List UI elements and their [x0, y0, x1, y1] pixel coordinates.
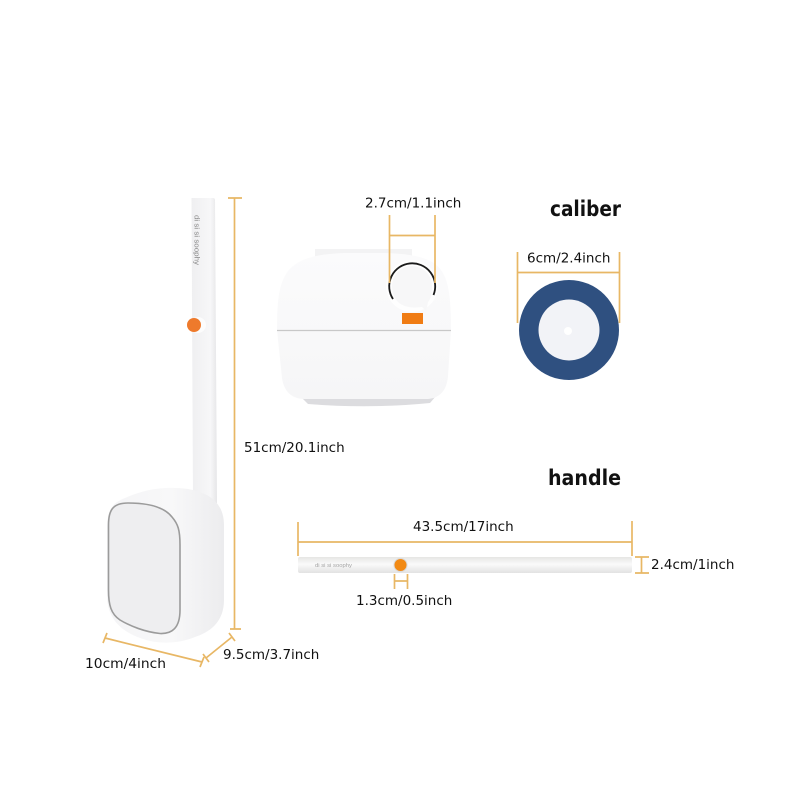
clip black ring — [389, 263, 435, 299]
dimension: width 10cm — [85, 633, 204, 672]
product: round brush head — [519, 280, 619, 380]
dimension: caliber 6cm: 6cm/2.4inch — [527, 250, 610, 266]
orange indicator — [402, 313, 423, 324]
holder divider line — [277, 330, 451, 332]
orange button — [187, 318, 201, 332]
dimension: depth 9.5cm: 9.5cm/3.7inch — [223, 647, 319, 663]
dimension: button 1.3cm — [356, 574, 452, 609]
dimension: height 51cm: 51cm/20.1inch — [244, 440, 345, 456]
dimension: width 10cm: 10cm/4inch — [85, 656, 166, 672]
handle brand mark: di si si soophy — [315, 563, 352, 569]
product: wall holder front view — [277, 249, 451, 406]
dimension: height 51cm — [228, 198, 345, 629]
holder top tab — [315, 249, 412, 263]
clip collar — [386, 260, 438, 312]
orange button — [394, 558, 407, 572]
handle bar — [298, 557, 632, 573]
white center — [538, 300, 600, 360]
brush base — [107, 488, 224, 643]
dimension: handle thickness 2.4cm: 2.4cm/1inch — [651, 557, 734, 573]
product: upright brush with handle — [107, 198, 224, 643]
vertical handle — [192, 198, 217, 503]
dimension: handle length 43.5cm — [298, 519, 632, 556]
dimension: caliber 6cm — [518, 250, 620, 323]
product: horizontal handle — [298, 557, 632, 573]
blue ring — [519, 280, 619, 380]
dimension: clip width 2.7cm — [365, 196, 461, 283]
center nub — [564, 327, 572, 335]
dimension: handle length 43.5cm: 43.5cm/17inch — [413, 519, 514, 535]
heading: caliber: caliber — [550, 197, 622, 221]
holder body — [277, 253, 451, 399]
dimension: depth 9.5cm — [203, 633, 319, 663]
handle brand mark: di si si soophy — [192, 215, 200, 266]
dimension: button 1.3cm: 1.3cm/0.5inch — [356, 593, 452, 609]
button highlight — [190, 317, 206, 333]
clip knob — [392, 266, 432, 311]
heading: handle: handle — [548, 466, 621, 490]
holder bottom lip — [300, 396, 436, 406]
dimension: clip width 2.7cm: 2.7cm/1.1inch — [365, 196, 461, 212]
base front panel — [108, 503, 180, 634]
